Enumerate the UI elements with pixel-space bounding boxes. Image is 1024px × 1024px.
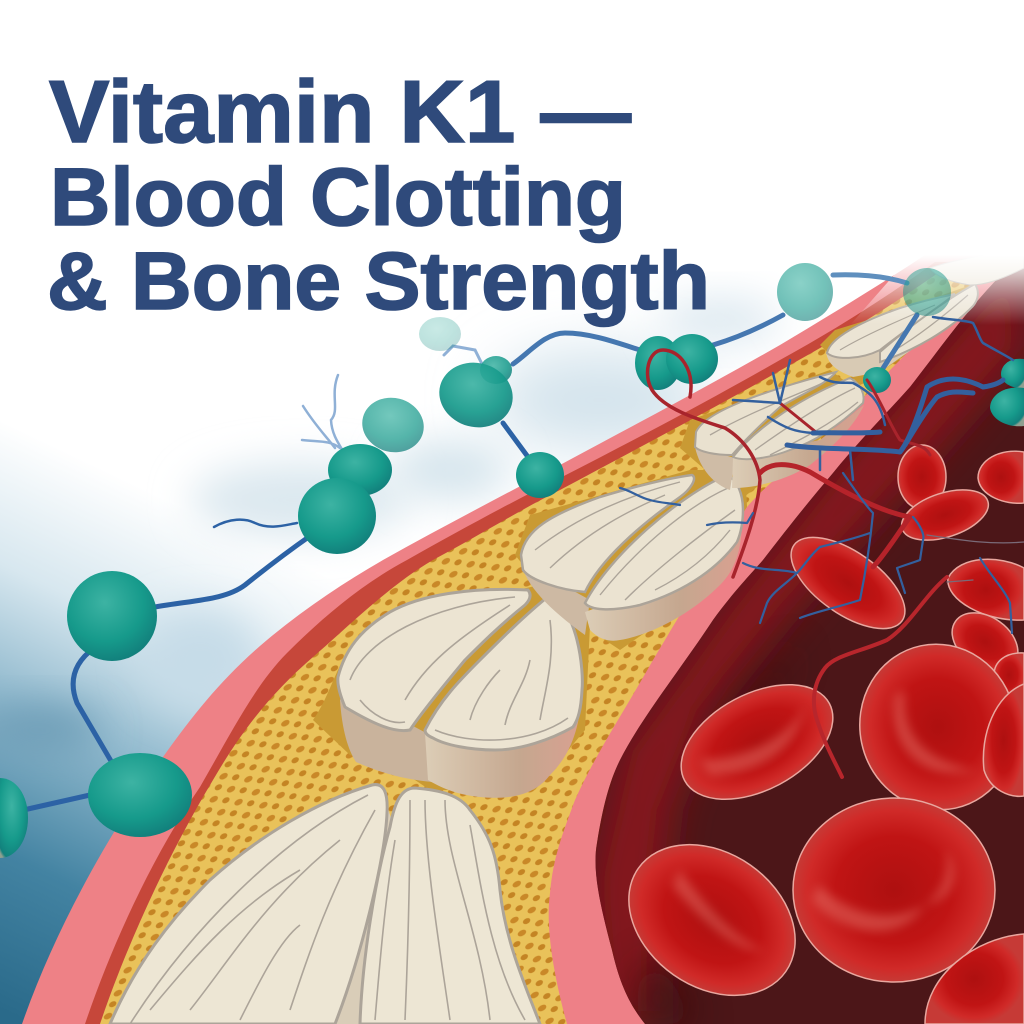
gold hollow around bones — [313, 280, 985, 790]
bead — [903, 268, 951, 316]
bead — [419, 317, 461, 351]
small cell — [776, 520, 920, 646]
title: Vitamin K1 — — [49, 62, 631, 161]
fade at vessel top right — [850, 240, 1024, 325]
small cell — [948, 559, 1024, 620]
bead — [0, 778, 28, 858]
bone plates — [110, 250, 1024, 1024]
blue and red capillaries — [620, 317, 1024, 777]
bead — [480, 356, 512, 384]
bead — [67, 571, 157, 661]
large cell — [600, 813, 824, 1024]
bead — [516, 452, 564, 498]
blue lower twigs — [620, 473, 1012, 633]
bead — [666, 334, 718, 384]
large cell — [983, 684, 1024, 796]
large cell — [844, 630, 1024, 824]
large cell — [925, 934, 1024, 1024]
title: Blood Clotting — [50, 152, 626, 243]
bead — [88, 753, 192, 837]
bead — [863, 367, 891, 393]
red fibre through lower lumen — [814, 577, 947, 777]
bead — [298, 478, 376, 554]
blue trunk network — [787, 379, 1003, 452]
bead — [1001, 359, 1024, 388]
vessel cross-section — [22, 240, 1024, 1024]
bead — [328, 444, 392, 496]
blood lumen — [580, 240, 1024, 1024]
bead — [777, 263, 833, 321]
molecule chain — [0, 263, 1024, 858]
title — [47, 62, 710, 327]
bead — [990, 387, 1024, 426]
bead — [635, 336, 681, 390]
bone pair upper — [521, 475, 743, 641]
outer artery wall — [22, 255, 1024, 1024]
inner wall — [549, 240, 1024, 1024]
bead — [432, 355, 520, 435]
grey thread — [927, 535, 1024, 582]
blue thin twigs — [733, 317, 1013, 480]
bone pair middle — [338, 589, 582, 798]
bone pair bottom — [110, 785, 540, 1024]
bead — [356, 391, 430, 459]
small cell — [895, 480, 995, 550]
small cell — [978, 451, 1024, 503]
cell highlights — [672, 690, 975, 950]
chain links — [19, 275, 917, 811]
bone pair fourth — [695, 372, 864, 490]
yellow porous layer — [100, 268, 1024, 1024]
dark wall edge — [85, 262, 1024, 1024]
red vessel branch into lumen — [760, 465, 910, 567]
red upper branch — [780, 380, 930, 455]
large cell — [662, 661, 852, 823]
small cell — [941, 601, 1024, 683]
bone pair fifth — [826, 284, 978, 377]
title: & Bone Strength — [47, 236, 710, 327]
small cell — [898, 445, 946, 509]
bone pair top — [930, 250, 1024, 285]
large cell — [793, 798, 995, 982]
red blood cells — [600, 445, 1024, 1024]
red vessel looping over beads — [648, 350, 760, 577]
small cell — [994, 653, 1024, 697]
